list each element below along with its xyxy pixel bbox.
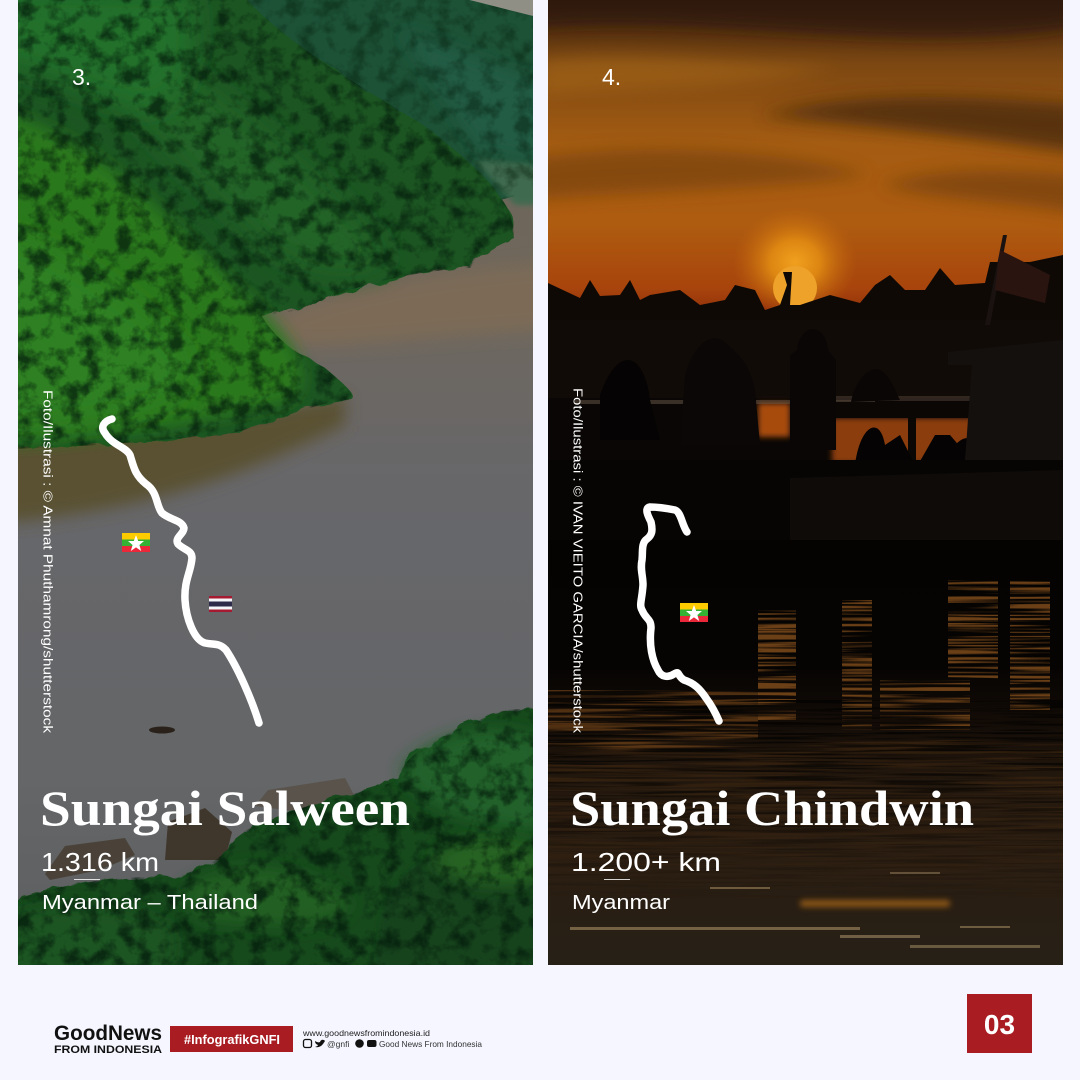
river route: Salween	[103, 419, 259, 723]
page number badge: 03	[984, 1009, 1015, 1040]
website and social handles: Good News From Indonesia	[379, 1039, 482, 1049]
icon: twitter	[315, 1040, 325, 1047]
length: 1.200+ km	[571, 847, 721, 877]
divider	[604, 879, 630, 880]
countries: Myanmar	[572, 892, 670, 914]
panel: Sungai Chindwin	[520, 0, 1080, 965]
website and social handles: www.goodnewsfromindonesia.id	[302, 1028, 430, 1038]
logo: GoodNews From Indonesia	[54, 1022, 162, 1056]
number 3: 3.	[72, 64, 91, 90]
photo: sunset over water with silhouettes	[520, 0, 1080, 965]
hashtag badge: #InfografikGNFI	[184, 1033, 280, 1047]
page number badge	[967, 994, 1032, 1053]
icon: instagram	[304, 1040, 312, 1048]
title: Sungai Chindwin: Sungai Chindwin	[570, 780, 974, 836]
panel: Sungai Salween	[18, 0, 533, 965]
water band behind figures	[548, 398, 1063, 464]
river route: Chindwin	[641, 507, 719, 721]
photo credit: Foto/Ilustrasi : © Amnat Phuthamrong/shutterstock	[40, 390, 56, 734]
flag: Myanmar	[680, 603, 708, 622]
icon: youtube	[367, 1040, 376, 1047]
footer	[54, 994, 1032, 1056]
length: 1.316 km	[41, 847, 159, 877]
boat	[965, 396, 1063, 460]
tree line	[548, 255, 1063, 320]
water reflection	[548, 540, 1063, 965]
countries: Myanmar – Thailand	[42, 892, 258, 914]
logo: GoodNews From Indonesia: FROM INDONESIA	[54, 1044, 162, 1056]
icon: facebook	[355, 1039, 364, 1048]
website and social handles: @gnfi	[327, 1039, 349, 1049]
logo: GoodNews From Indonesia: GoodNews	[54, 1022, 162, 1045]
flag: Thailand	[209, 596, 232, 612]
photo: river with forested hills	[18, 0, 533, 965]
huts and boats	[255, 778, 355, 812]
number 4: 4.	[602, 64, 621, 90]
website and social handles	[302, 1028, 482, 1049]
divider	[74, 879, 100, 880]
photo credit: Foto/Ilustrasi : © IVAN VIEITO GARCIA/shutterstock	[570, 388, 586, 734]
people silhouettes	[600, 360, 651, 404]
flag: Myanmar	[122, 533, 150, 552]
hashtag badge	[170, 1026, 293, 1052]
title: Sungai Salween: Sungai Salween	[40, 780, 410, 836]
